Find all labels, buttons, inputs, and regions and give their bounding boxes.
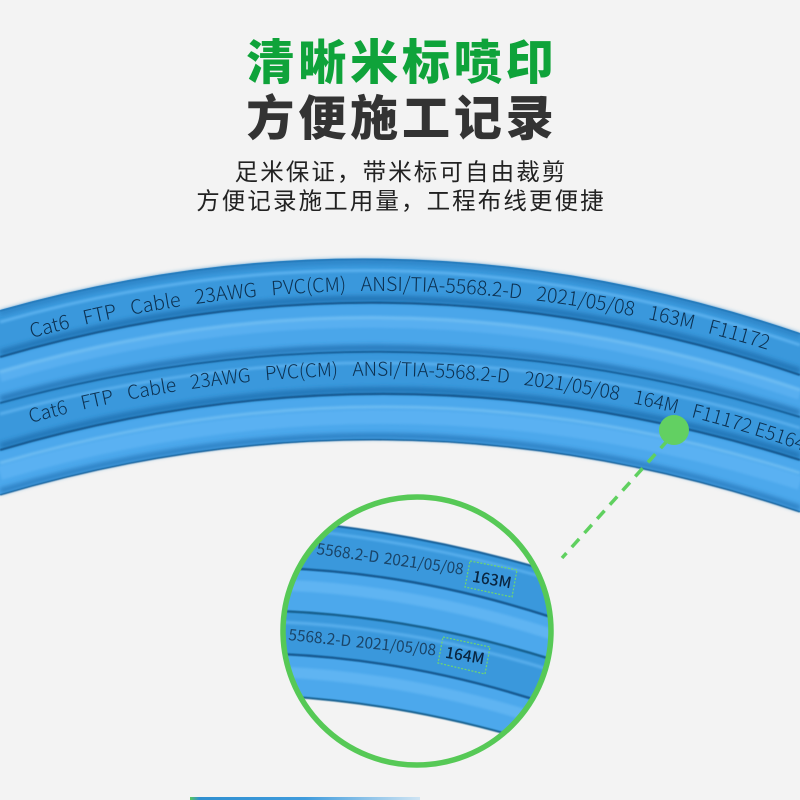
bottom edge strip of next section — [190, 797, 420, 800]
title line 1: 清晰米标喷印 — [246, 37, 558, 90]
inset green ring — [283, 497, 551, 765]
inset highlight: 164M: 164M — [444, 641, 486, 669]
callout: dashed leader line and marker dot — [562, 415, 689, 558]
subtitle line 2: 方便记录施工用量，工程布线更便捷 — [196, 188, 606, 214]
inset highlight: 164M — [438, 637, 490, 674]
magnified inset of the meter marks — [280, 497, 560, 765]
inset highlight: 163M: 163M — [471, 565, 513, 593]
inset highlight: 163M — [465, 561, 517, 597]
title line 2: 方便施工记录 — [246, 93, 558, 146]
inset text: second marking: 5568.2-D 2021/05/08 — [287, 623, 437, 660]
subtitle line 1: 足米保证，带米标可自由裁剪 — [235, 159, 567, 185]
main blue cable coil — [0, 256, 800, 514]
illustration: cable, inset and callout — [0, 256, 800, 800]
inset text: first marking: 5568.2-D 2021/05/08 — [315, 537, 465, 580]
printed marking: 163M line: Cat6 FTP Cable 23AWG PVC(CM) ANSI/TIA-5568.2-D 2021/05/08 163M F11172 — [30, 276, 770, 350]
